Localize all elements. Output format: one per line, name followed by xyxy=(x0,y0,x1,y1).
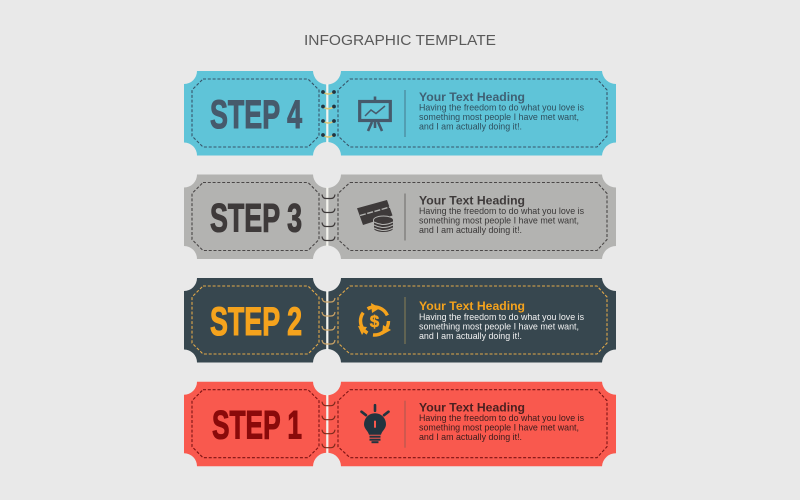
spiral binding xyxy=(322,298,335,344)
text block: Having the freedom to do what you love is xyxy=(419,413,584,423)
spiral binding xyxy=(322,194,335,240)
stitching xyxy=(192,390,607,458)
panel: step 4 xyxy=(184,71,616,156)
divider xyxy=(404,90,406,137)
text block xyxy=(419,403,584,442)
text block: Your Text Heading xyxy=(419,403,525,415)
text block: something most people I have met want, xyxy=(419,112,579,122)
text block: and I am actually doing it!. xyxy=(419,225,522,235)
text block: and I am actually doing it!. xyxy=(419,331,522,341)
text block xyxy=(419,301,584,341)
ticket shape right xyxy=(328,174,616,259)
stitching xyxy=(192,286,607,354)
step label: STEP 1 xyxy=(212,404,302,448)
text block: and I am actually doing it!. xyxy=(419,122,522,132)
icon: card and coins xyxy=(357,200,394,232)
icon: presentation board xyxy=(360,96,390,131)
ticket shape right xyxy=(328,382,616,466)
ticket shape right xyxy=(328,71,616,156)
ticket shape left xyxy=(184,174,326,259)
text block: Having the freedom to do what you love is xyxy=(419,312,584,322)
spiral binding xyxy=(322,402,335,448)
text block xyxy=(419,92,584,132)
text block: and I am actually doing it!. xyxy=(419,432,522,442)
step label: STEP 4 xyxy=(210,93,303,137)
text block: something most people I have met want, xyxy=(419,216,579,226)
ticket shape left xyxy=(184,71,326,156)
text block: Your Text Heading xyxy=(419,196,525,208)
icon: dollar cycle: $ xyxy=(370,312,380,331)
ticket shape left xyxy=(184,278,326,362)
divider xyxy=(404,194,406,240)
text block: Your Text Heading xyxy=(419,301,525,313)
icon: dollar cycle xyxy=(358,303,391,335)
spiral binding xyxy=(321,90,336,137)
title: INFOGRAPHIC TEMPLATE xyxy=(304,33,496,49)
text block: Having the freedom to do what you love is xyxy=(419,102,584,112)
ticket shape left xyxy=(184,382,326,466)
step label: STEP 2 xyxy=(210,300,302,344)
stitching xyxy=(192,79,607,147)
divider xyxy=(404,297,406,344)
text block: Having the freedom to do what you love is xyxy=(419,206,584,216)
text block xyxy=(419,196,584,235)
step label: STEP 3 xyxy=(210,196,302,240)
panel: step 2 xyxy=(184,278,616,362)
panel: step 1 xyxy=(184,382,616,466)
divider xyxy=(404,401,406,448)
panel: step 3 xyxy=(184,174,616,259)
ticket shape right xyxy=(328,278,616,362)
text block: Your Text Heading xyxy=(419,92,525,104)
text block: something most people I have met want, xyxy=(419,423,579,433)
stitching xyxy=(192,182,607,250)
text block: something most people I have met want, xyxy=(419,322,579,332)
icon: light bulb xyxy=(362,405,388,443)
